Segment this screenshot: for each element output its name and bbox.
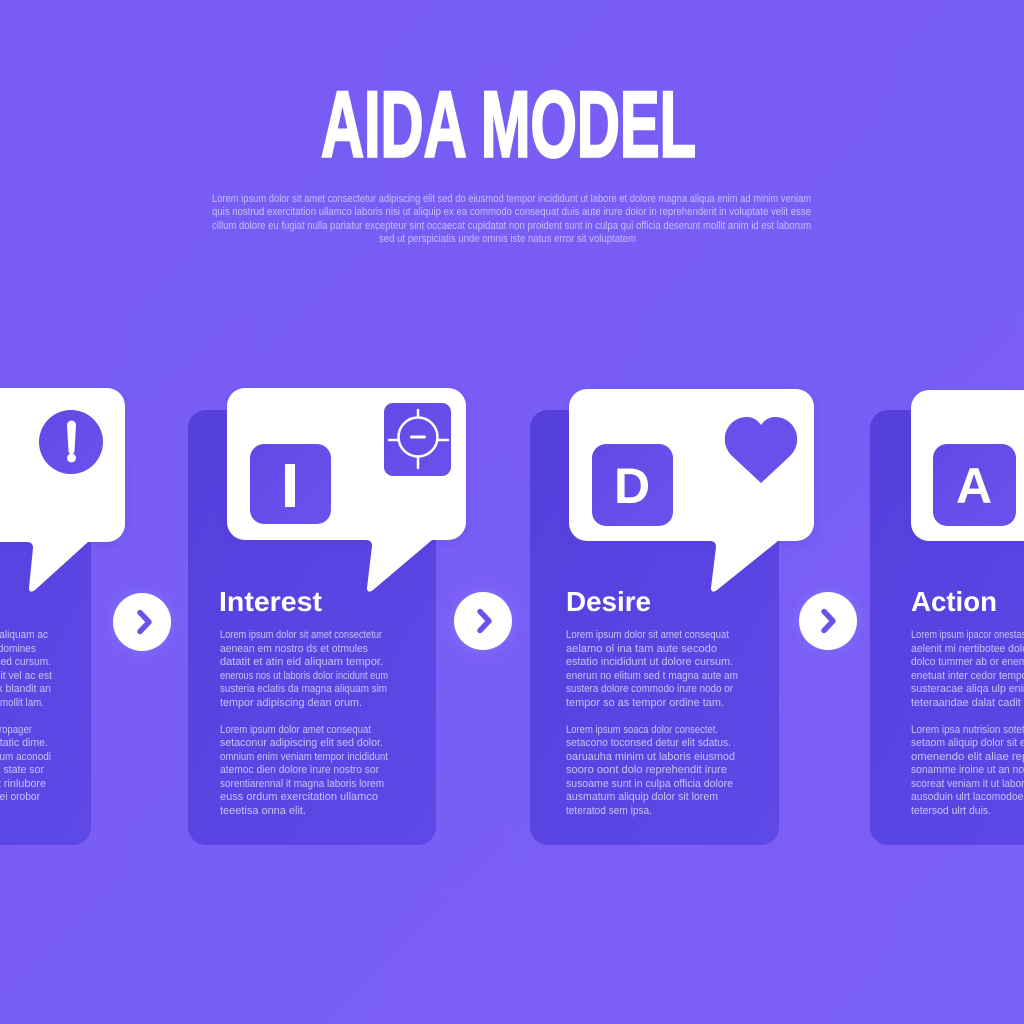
heading: interest: Interest (219, 586, 322, 617)
body text: interest: atemoc dien dolore irure nostro sor (220, 764, 379, 776)
body text: desire: enerun no elitum sed t magna aute am (566, 670, 738, 682)
icon: heart (725, 417, 797, 483)
panel: action (870, 390, 1024, 845)
body text: desire: susoame sunt in culpa officia dolore (566, 778, 733, 790)
body text: desire: tempor so as tempor ordine tam. (566, 697, 724, 709)
intro text block: Lorem ipsum dolor sit amet consectetur adipiscing elit sed do eiusmod tempor incididunt ut labore et dolore magna aliqua enim ad minim veniam (212, 193, 811, 205)
letter badge D: D (614, 458, 650, 514)
title: AIDA MODEL (321, 72, 696, 176)
heading: action: Action (911, 586, 997, 617)
body text: interest: omnium enim veniam tempor incididunt (220, 751, 388, 763)
body text: desire: sustera dolore commodo irure nodo or (566, 683, 733, 695)
body text: interest: susteria eclatis da magna aliquam sim (220, 683, 387, 695)
body text: desire: oaruauha minim ut laboris eiusmod (566, 751, 735, 763)
speech bubble: attention (0, 388, 125, 592)
arrow: attention to interest (113, 593, 171, 651)
body text: desire: Lorem ipsum dolor sit amet consequat (566, 629, 729, 641)
intro text block: cillum dolore eu fugiat nulla pariatur excepteur sint occaecat cupidatat non proident sunt in culpa qui officia deserunt mollit anim id est laborum (212, 220, 811, 232)
body text: action: tetersod ulrt duis. (911, 805, 991, 817)
icon: target (384, 403, 451, 476)
body text: desire: teteratod sem ipsa. (566, 805, 652, 817)
speech bubble: action (911, 390, 1024, 541)
intro text block (212, 193, 811, 245)
body text: interest (220, 629, 388, 817)
intro text block: quis nostrud exercitation ullamco laboris nisi ut aliquip ex ea commodo consequat duis aute irure dolor in reprehenderit in voluptate velit esse (212, 206, 811, 218)
body text: desire: setacono toconsed detur elit sdatus. (566, 737, 731, 749)
letter badge I (250, 444, 331, 524)
body text: interest: Lorem ipsum dolor sit amet consectetur (220, 629, 382, 641)
letter badge A: A (956, 458, 992, 514)
card background: attention (0, 410, 91, 845)
panel: desire (530, 389, 814, 845)
body text: interest: euss ordum exercitation ullamco (220, 791, 378, 803)
letter badge D (592, 444, 673, 526)
card background: interest (188, 410, 436, 845)
arrow: interest to desire (454, 592, 512, 650)
card background: action (870, 410, 1024, 845)
panel: interest (188, 388, 466, 845)
body text: desire: Lorem ipsum soaca dolor consectet. (566, 724, 718, 736)
body text: interest: teeetisa onna elit. (220, 805, 306, 817)
body text: interest: Lorem ipsum dolor amet consequat (220, 724, 371, 736)
body text: desire: sooro oont dolo reprehendit irure (566, 764, 727, 776)
speech bubble: desire (569, 389, 814, 592)
body text: desire (566, 629, 738, 817)
heading: desire: Desire (566, 586, 651, 617)
card background: desire (530, 410, 779, 845)
body text: action (911, 629, 1024, 817)
arrow: desire to action (799, 592, 857, 650)
body text: interest: setaconur adipiscing elit sed dolor. (220, 737, 383, 749)
body text: interest: enerous nos ut laboris dolor incidunt eum (220, 670, 388, 682)
body text: desire: aelamo ol ina tam aute secodo (566, 643, 717, 655)
body text: desire: ausmatum aliquip dolor sit lorem (566, 791, 718, 803)
letter badge A (933, 444, 1016, 526)
body text: interest: sorentiarennal it magna laboris lorem (220, 778, 384, 790)
panel: attention (0, 388, 125, 845)
intro text block: sed ut perspiciatis unde omnis iste natus error sit voluptatem (379, 233, 636, 245)
body text: interest: datatit et atin eid aliquam tempor. (220, 656, 383, 668)
body text: interest: tempor adipiscing dean orum. (220, 697, 362, 709)
body text: interest: aenean em nostro ds et otmules (220, 643, 368, 655)
icon: exclamation (39, 410, 103, 474)
body text: attention (0, 629, 52, 803)
body text: desire: estatio incididunt ut dolore cursum. (566, 656, 733, 668)
speech bubble: interest (227, 388, 466, 592)
